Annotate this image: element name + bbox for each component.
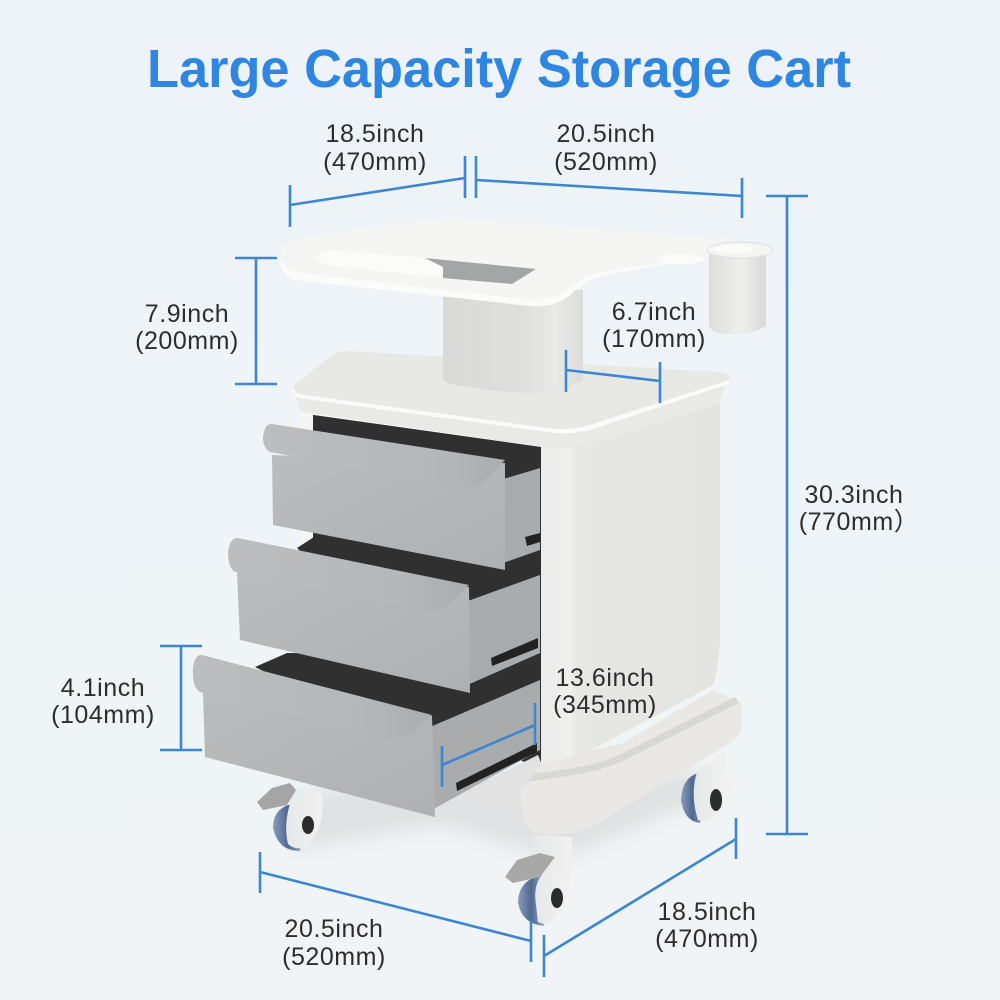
dim bottom left: 20.5inch <box>285 915 383 943</box>
dim 6.7: 6.7inch <box>612 298 696 326</box>
dim height 7.9 <box>135 258 277 384</box>
column <box>443 290 583 393</box>
dim 4.1 <box>51 646 202 750</box>
dim height 7.9: (200mm) <box>135 327 239 355</box>
dim 6.7 <box>566 298 706 403</box>
dim bottom right: 18.5inch <box>658 898 756 926</box>
wheel rear right <box>681 750 727 823</box>
cabinet rear frame <box>300 396 546 660</box>
dim top right: (520mm) <box>554 148 658 176</box>
dim 6.7: (170mm) <box>602 325 706 353</box>
dim height 30.3: 30.3inch <box>805 481 903 509</box>
dim top left: 18.5inch <box>326 120 424 148</box>
floor shadow <box>290 770 725 860</box>
dim bottom left: (520mm) <box>282 943 386 971</box>
cabinet interior <box>313 415 541 770</box>
dim height 30.3 <box>766 196 919 834</box>
title: Large Capacity Storage Cart <box>147 39 851 99</box>
cup holder <box>707 242 773 334</box>
dim 4.1: 4.1inch <box>61 674 145 702</box>
drawer 2 <box>228 535 540 693</box>
dim bottom right <box>544 818 759 977</box>
dim top left <box>290 120 465 227</box>
drawer 1 <box>263 415 540 570</box>
top tray <box>280 218 741 306</box>
dim top left: (470mm) <box>323 148 427 176</box>
cabinet side panel <box>541 400 720 763</box>
wheel front <box>505 835 573 926</box>
dim top right <box>476 120 742 218</box>
dim height 30.3: (770mm） <box>799 508 919 536</box>
dim bottom right: (470mm) <box>655 925 759 953</box>
dim bottom left <box>260 852 531 971</box>
dim 13.6 <box>442 664 657 787</box>
lower shelf <box>292 351 730 448</box>
under drawer shelf <box>457 755 542 815</box>
dim 4.1: (104mm) <box>51 701 155 729</box>
base <box>520 690 742 835</box>
dim height 7.9: 7.9inch <box>145 300 229 328</box>
wheel rear left <box>257 783 323 851</box>
dim 13.6: 13.6inch <box>556 664 654 692</box>
dim 13.6: (345mm) <box>553 691 657 719</box>
small cup recess <box>656 254 704 264</box>
tray handle hole <box>318 250 536 284</box>
drawer 3 <box>193 653 540 817</box>
dim top right: 20.5inch <box>557 120 655 148</box>
cart illustration <box>193 218 773 926</box>
